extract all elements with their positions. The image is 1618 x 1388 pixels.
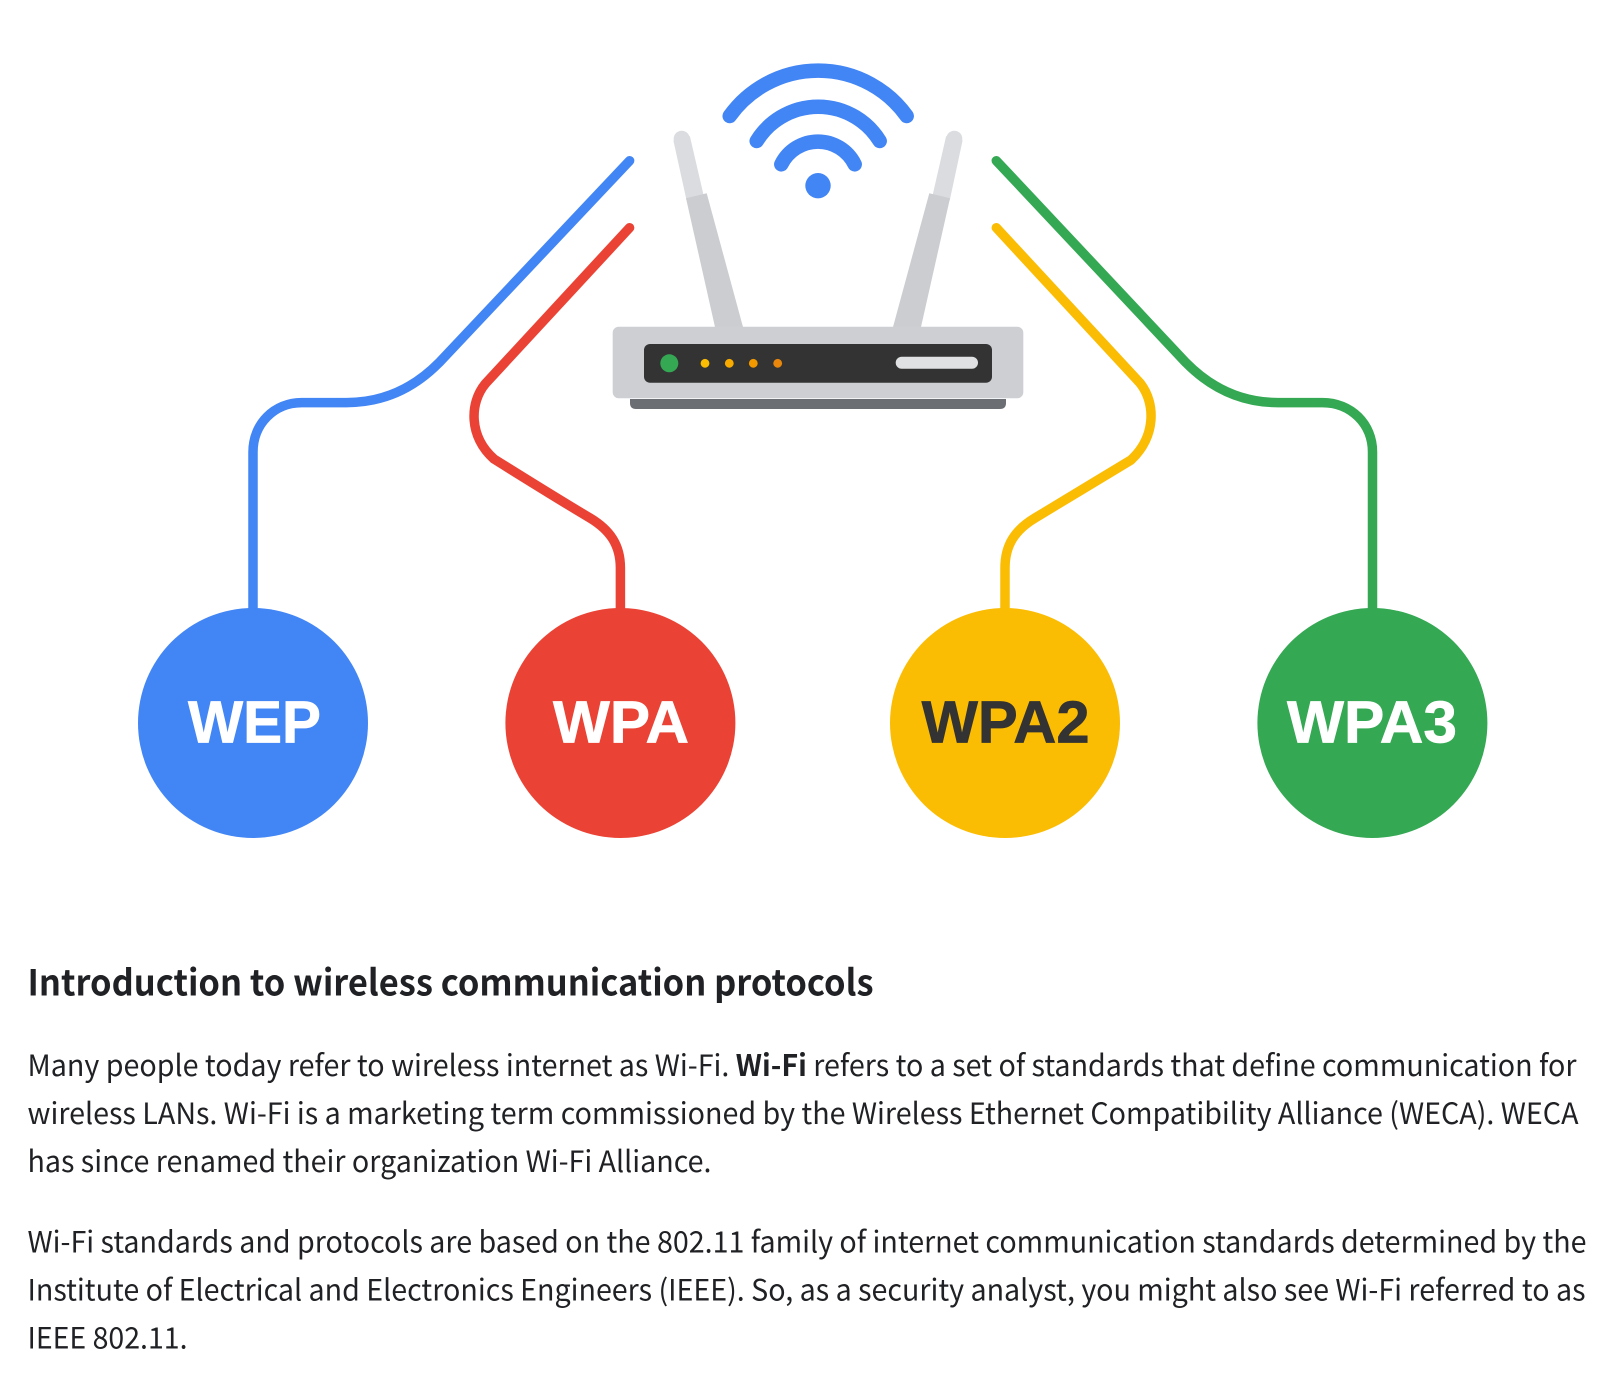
- paragraph: what Wi-Fi means: wireless LANs. Wi-Fi is a marketing term commissioned by the Wireless Ethernet Compatibility Alliance (WECA). WECA: [28, 1091, 1579, 1133]
- paragraph: IEEE 802.11 standards: [28, 1220, 1586, 1358]
- node: WPA3: WPA3: [1287, 689, 1457, 755]
- connector: router to WPA2: [996, 228, 1151, 612]
- node: WPA: [505, 608, 735, 838]
- node: WPA2: WPA2: [922, 689, 1090, 755]
- connector: router to WPA: [474, 228, 630, 612]
- node: WEP: WEP: [188, 689, 321, 755]
- icon: wifi signal: [730, 71, 907, 198]
- paragraph: what Wi-Fi means: has since renamed their organization Wi-Fi Alliance.: [28, 1139, 712, 1181]
- paragraph: IEEE 802.11 standards: Institute of Electrical and Electronics Engineers (IEEE). So, as a security analyst, you might also see Wi-Fi referred to as: [28, 1268, 1586, 1310]
- paragraph: what Wi-Fi means: [28, 1043, 1579, 1181]
- connector: router to WPA3: [996, 161, 1372, 612]
- paragraph: what Wi-Fi means: Many people today refer to wireless internet as Wi-Fi. Wi-Fi refers to a set of standards that define communication for: [28, 1043, 1577, 1085]
- heading: Introduction to wireless communication protocols: [28, 954, 874, 1006]
- node: WPA2: [890, 608, 1120, 838]
- node: WEP: [138, 608, 368, 838]
- paragraph: IEEE 802.11 standards: Wi-Fi standards and protocols are based on the 802.11 family of internet communication standards determined by the: [28, 1220, 1586, 1262]
- connector: router to WEP: [253, 161, 630, 612]
- node: WPA: WPA: [553, 689, 689, 755]
- paragraph: IEEE 802.11 standards: IEEE 802.11.: [28, 1316, 188, 1358]
- node: WPA3: [1257, 608, 1487, 838]
- icon: router: [613, 131, 1023, 409]
